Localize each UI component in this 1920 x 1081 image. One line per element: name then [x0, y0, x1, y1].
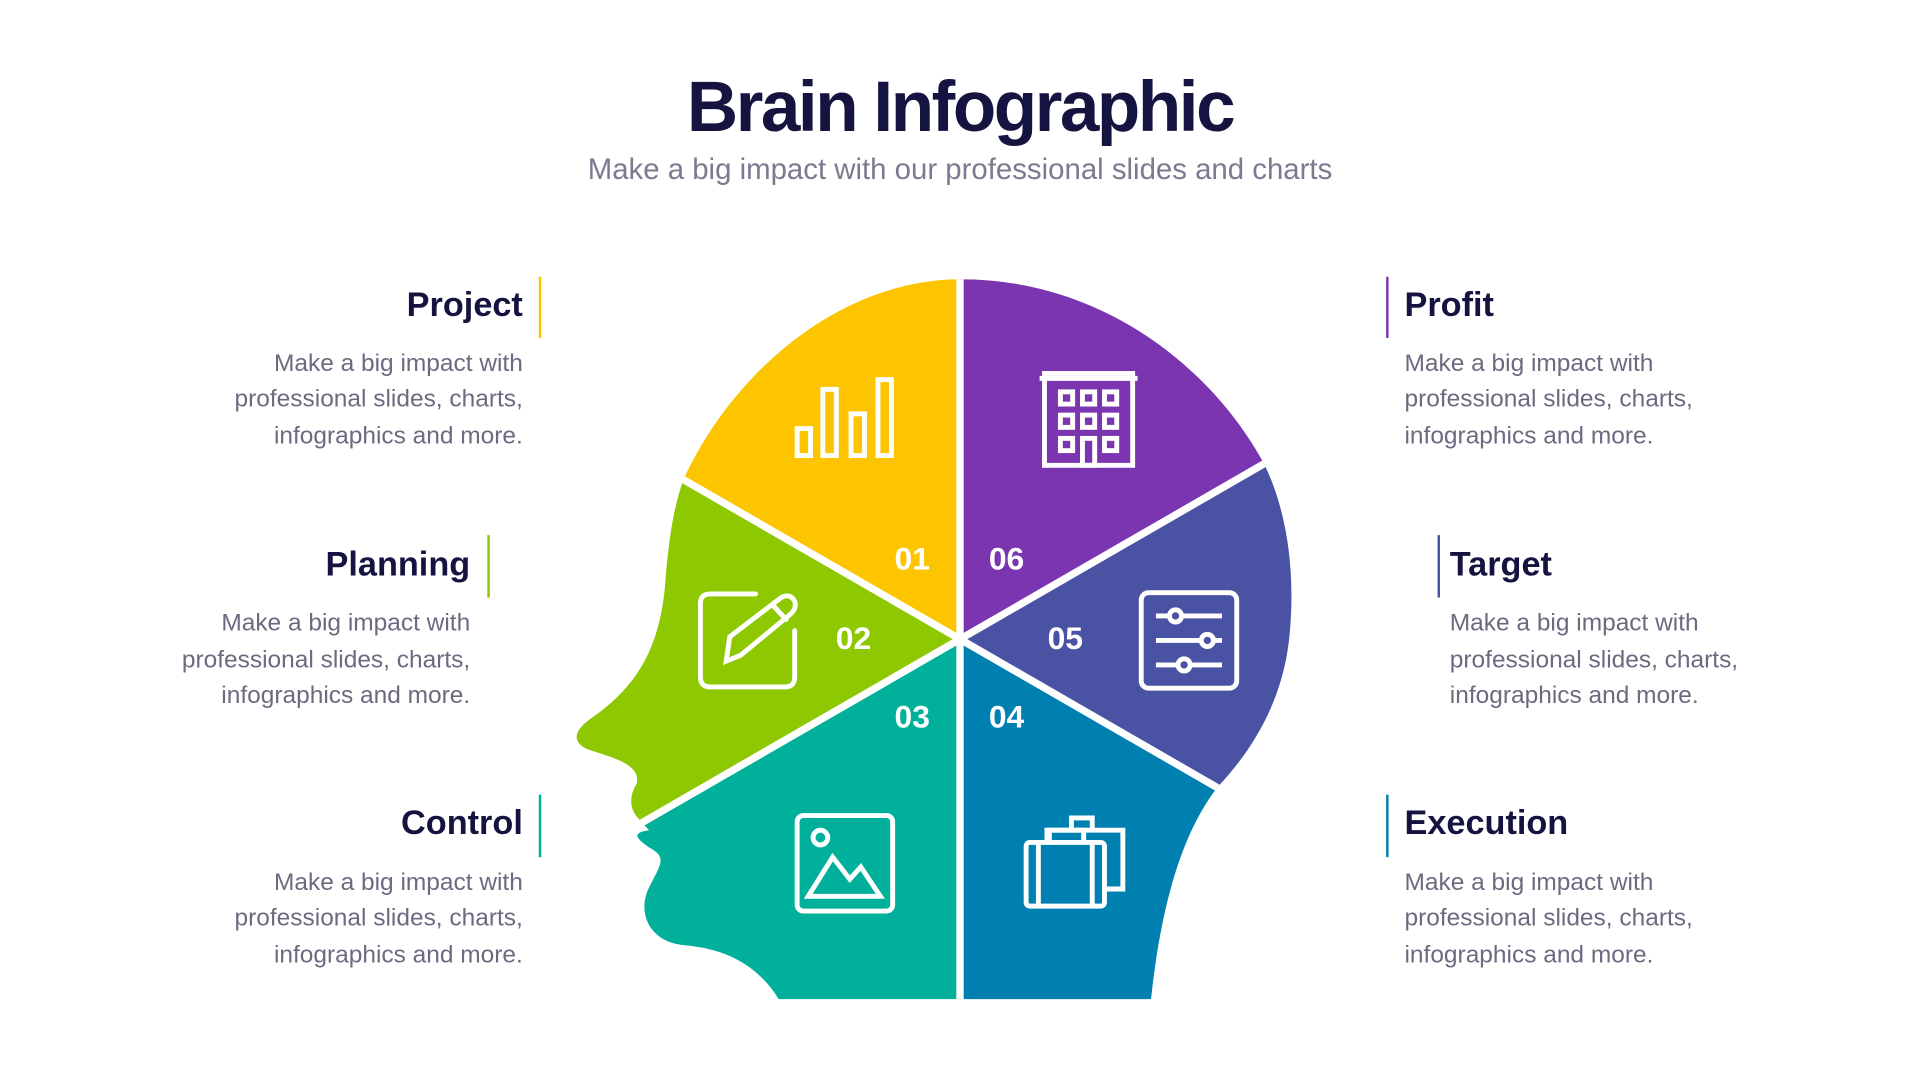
block: Planning: [182, 535, 489, 709]
block: Planning: Make a big impact with: [221, 610, 470, 637]
block: Planning: Planning: [326, 546, 470, 584]
block: Project: professional slides, charts,: [235, 386, 523, 413]
block: Execution: infographics and more.: [1404, 941, 1653, 968]
numbers: 04: [989, 698, 1025, 734]
numbers: 02: [836, 620, 871, 656]
numbers: 06: [989, 540, 1024, 576]
block: Target: [1439, 535, 1738, 709]
numbers: 01: [895, 540, 930, 576]
block: Project: Project: [407, 286, 523, 324]
block: Control: Make a big impact with: [274, 869, 523, 896]
block: Project: infographics and more.: [274, 422, 523, 449]
block: Target: Target: [1450, 546, 1552, 584]
block: Profit: infographics and more.: [1404, 422, 1653, 449]
block: Target: Make a big impact with: [1450, 610, 1699, 637]
block: Control: professional slides, charts,: [235, 905, 523, 932]
block: Profit: Make a big impact with: [1404, 350, 1653, 377]
title: Brain Infographic: [687, 68, 1234, 147]
block: Execution: Make a big impact with: [1404, 869, 1653, 896]
subtitle: Make a big impact with our professional slides and charts: [588, 153, 1332, 186]
block: Project: Make a big impact with: [274, 350, 523, 377]
block: Planning: professional slides, charts,: [182, 646, 470, 673]
block: Target: infographics and more.: [1450, 682, 1699, 709]
block: Control: [235, 795, 540, 968]
block: Execution: Execution: [1404, 804, 1568, 842]
block: Profit: Profit: [1404, 286, 1494, 324]
block: Control: Control: [401, 804, 523, 842]
block: Planning: infographics and more.: [221, 682, 470, 709]
block: Execution: [1387, 795, 1693, 968]
icon: building: [1040, 373, 1138, 465]
block: Execution: professional slides, charts,: [1404, 905, 1693, 932]
icon: bar chart: [797, 380, 891, 456]
block: Control: infographics and more.: [274, 941, 523, 968]
numbers: 03: [895, 698, 930, 734]
head diagram: [576, 279, 1292, 1000]
icon: pencil box: [700, 594, 795, 687]
block: Project: [235, 277, 540, 449]
icon: suitcase: [1026, 818, 1123, 906]
icon: sliders: [1141, 593, 1237, 688]
block: Profit: [1387, 277, 1693, 449]
block: Target: professional slides, charts,: [1450, 646, 1738, 673]
numbers: 05: [1048, 620, 1083, 656]
numbers: [836, 540, 1083, 734]
icon: image: [797, 816, 893, 911]
block: Profit: professional slides, charts,: [1404, 386, 1693, 413]
